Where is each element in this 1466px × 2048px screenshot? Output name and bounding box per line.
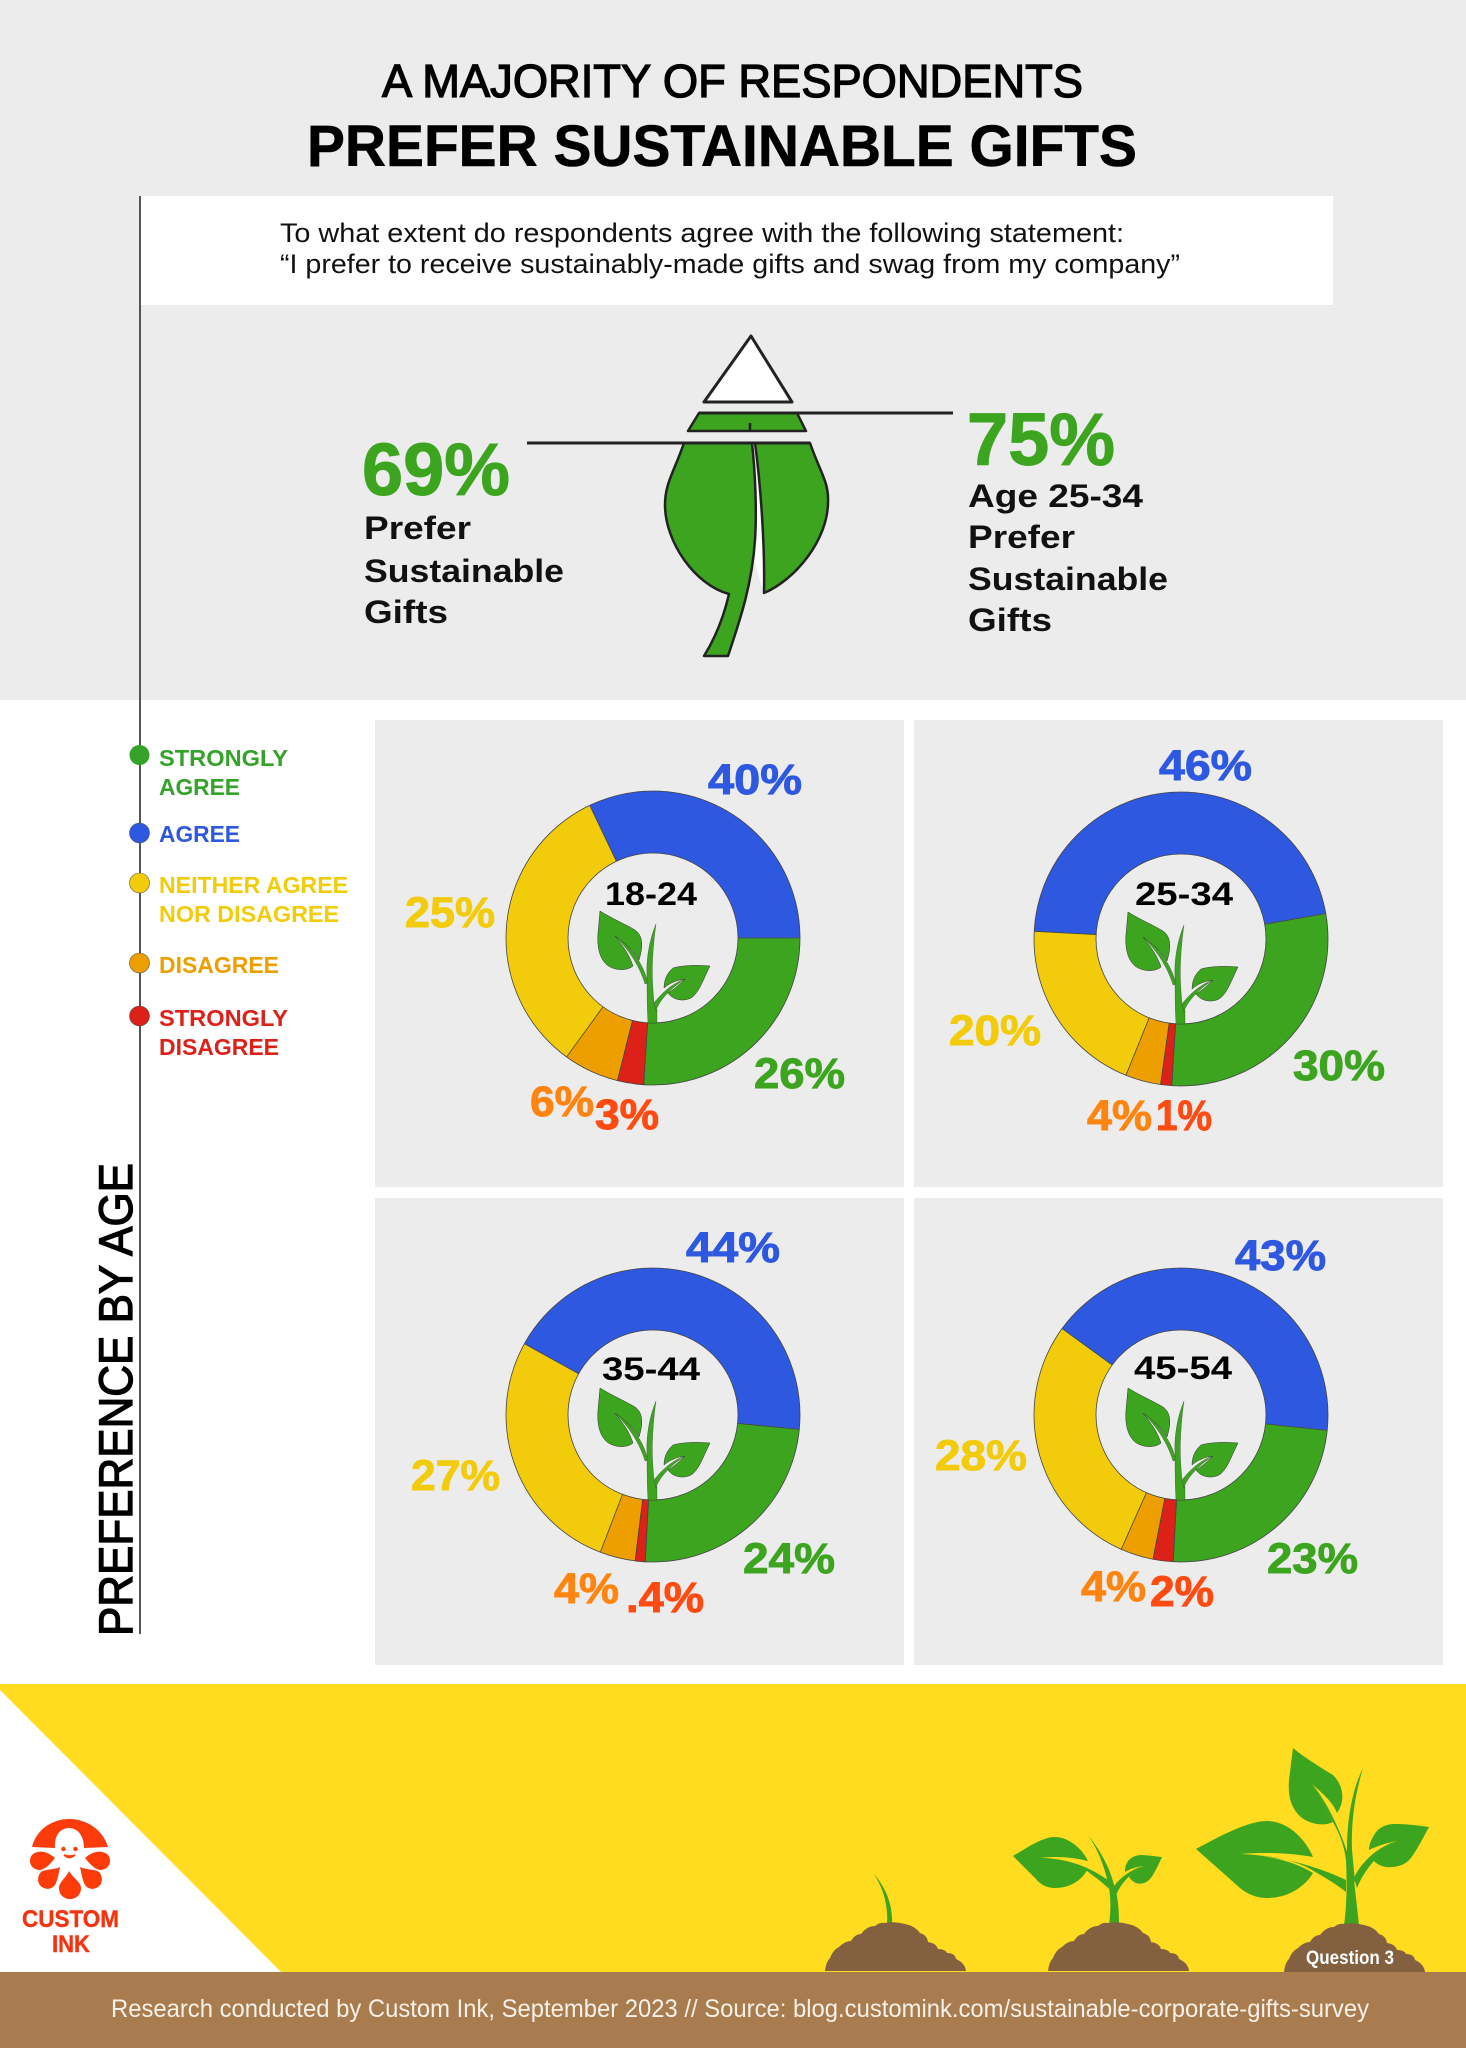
legend: NEITHER AGREE <box>159 872 348 898</box>
legend: NOR DISAGREE <box>159 901 339 927</box>
value labels <box>411 1224 835 1622</box>
value labels: 4% <box>1087 1092 1152 1140</box>
donut chart: 18-24 <box>491 776 815 1100</box>
title: PREFER SUSTAINABLE GIFTS <box>307 114 1137 179</box>
footer source text: Research conducted by Custom Ink, September 2023 // Source: blog.customink.com/sustainable-corporate-gifts-survey <box>111 1995 1369 2023</box>
legend: STRONGLY <box>159 1005 288 1031</box>
value labels <box>405 756 845 1139</box>
value labels: 6% <box>530 1078 594 1126</box>
legend <box>130 745 348 1060</box>
timeline axis line <box>139 196 141 1634</box>
value labels: 4% <box>1081 1563 1146 1611</box>
panel: header background <box>0 0 1466 700</box>
stat: 69 percent <box>362 428 564 630</box>
legend: AGREE <box>159 774 240 800</box>
stat: 69 percent: Gifts <box>364 594 448 630</box>
stat: 75 percent age 25-34: Age 25-34 <box>968 478 1143 514</box>
panel: brown footer bar <box>0 1972 1466 2048</box>
panel: age 45-54 <box>914 1198 1443 1665</box>
age label: 18-24 <box>605 876 697 912</box>
icon: young plant in soil <box>1013 1835 1189 1971</box>
value labels: 26% <box>754 1050 845 1098</box>
value labels: 43% <box>1235 1232 1326 1280</box>
question box: To what extent do respondents agree with the following statement: <box>280 218 1124 248</box>
panel: age 25-34 <box>914 720 1443 1187</box>
value labels: 2% <box>1150 1568 1214 1616</box>
logo: Custom Ink: INK <box>52 1931 91 1958</box>
logo: Custom Ink <box>22 1819 119 1958</box>
stat: 69 percent: Prefer <box>364 510 471 546</box>
value labels <box>935 1232 1358 1616</box>
age label: 45-54 <box>1134 1350 1232 1386</box>
icon: leaf proportion graphic <box>527 336 953 656</box>
stat: 75 percent age 25-34 <box>967 398 1168 638</box>
panel: age 18-24 <box>375 720 904 1187</box>
stat: 75 percent age 25-34: Gifts <box>968 602 1052 638</box>
question box <box>140 196 1333 305</box>
question box: “I prefer to receive sustainably-made gifts and swag from my company” <box>280 249 1180 279</box>
value labels: .4% <box>626 1574 704 1622</box>
panel: yellow footer band <box>0 1684 1466 1973</box>
stat: 75 percent age 25-34: Sustainable <box>968 561 1168 597</box>
value labels: 30% <box>1293 1042 1385 1090</box>
value labels: 4% <box>554 1565 619 1613</box>
value labels: 1% <box>1156 1092 1212 1140</box>
legend: DISAGREE <box>159 952 279 978</box>
icon: grown plant in soil <box>1196 1748 1429 1972</box>
label: question number: Question 3 <box>1306 1948 1394 1969</box>
value labels: 27% <box>411 1452 500 1500</box>
value labels <box>949 742 1385 1140</box>
value labels: 25% <box>405 889 495 937</box>
title: A MAJORITY OF RESPONDENTS <box>382 55 1083 107</box>
panel: age 35-44 <box>375 1198 904 1665</box>
value labels: 46% <box>1159 742 1252 790</box>
value labels: 23% <box>1267 1535 1358 1583</box>
value labels: 3% <box>595 1091 659 1139</box>
legend: STRONGLY <box>159 745 288 771</box>
value labels: 44% <box>686 1224 780 1272</box>
stat: 75 percent age 25-34: 75% <box>967 398 1115 481</box>
value labels: 28% <box>935 1432 1027 1480</box>
logo wordmark: CUSTOM <box>22 1906 119 1933</box>
legend: DISAGREE <box>159 1034 279 1060</box>
value labels: 40% <box>708 756 802 804</box>
age label: 25-34 <box>1135 876 1233 912</box>
value labels: 24% <box>743 1535 835 1583</box>
stat: 75 percent age 25-34: Prefer <box>968 519 1075 555</box>
donut chart: 45-54 <box>1019 1253 1343 1577</box>
title <box>307 55 1137 179</box>
stat: 69 percent: 69% <box>362 428 510 511</box>
heading: preference by age: PREFERENCE BY AGE <box>89 1163 142 1636</box>
icon: seedling in soil <box>825 1874 966 1971</box>
legend: AGREE <box>159 821 240 847</box>
stat: 69 percent: Sustainable <box>364 553 564 589</box>
donut chart: 25-34 <box>1030 788 1332 1090</box>
icon: octopus mark <box>30 1819 110 1899</box>
value labels: 20% <box>949 1007 1041 1055</box>
donut chart: 35-44 <box>495 1257 811 1573</box>
age label: 35-44 <box>602 1351 700 1387</box>
